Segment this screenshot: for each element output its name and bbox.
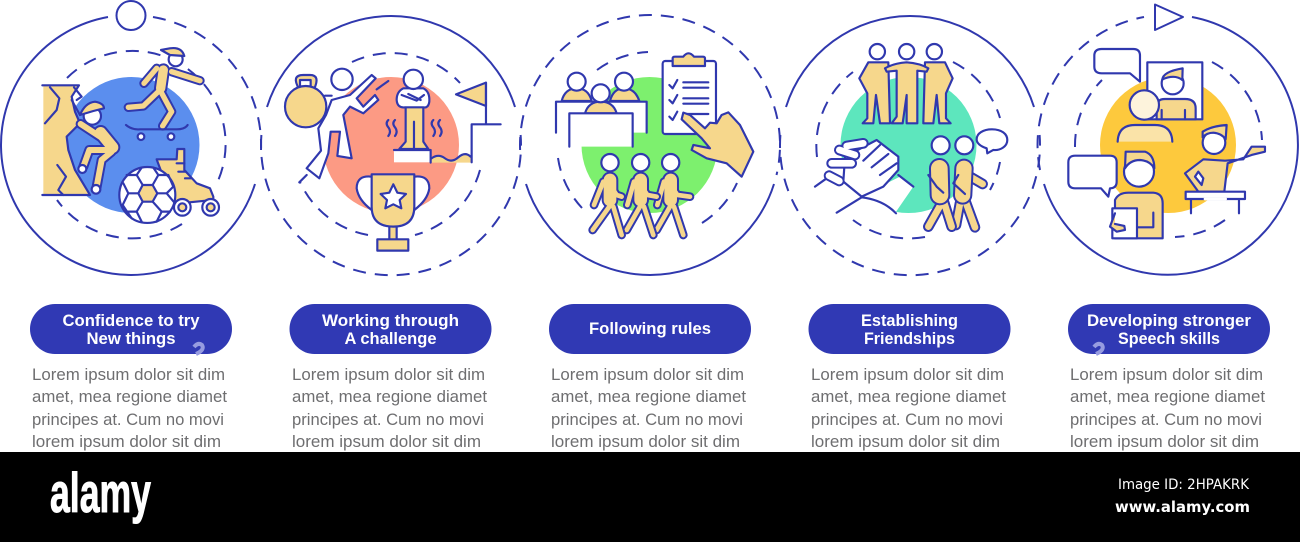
- watermark logo: alamy: [50, 461, 151, 524]
- icon: three friends: [859, 44, 953, 123]
- step label 4: Establishing: [861, 311, 958, 330]
- step label 1: [30, 304, 232, 354]
- icon: sports: [42, 48, 219, 223]
- body text 3: lorem ipsum dolor sit dim: [551, 433, 740, 451]
- icon: walkers: [593, 154, 690, 235]
- watermark footer bar: [0, 452, 1300, 542]
- image id: Image ID: 2HPAKRK: [1118, 477, 1250, 493]
- step label 5: Speech skills: [1118, 329, 1220, 348]
- outer ring: [520, 15, 780, 275]
- icon: teacher at lectern: [1185, 125, 1265, 213]
- step label 4: [808, 304, 1010, 354]
- body text 3: Lorem ipsum dolor sit dim: [551, 366, 744, 384]
- icon: runner: [299, 69, 388, 182]
- panel: friendships illustration: [780, 16, 1040, 275]
- step label 3: Following rules: [589, 319, 711, 338]
- icon: kettlebell: [285, 75, 326, 127]
- icon: pointing hand: [682, 112, 753, 177]
- body text 4: amet, mea regione diamet: [811, 388, 1006, 406]
- body text 4: lorem ipsum dolor sit dim: [811, 433, 1000, 451]
- body text 5: amet, mea regione diamet: [1070, 388, 1265, 406]
- outer ring: [1, 17, 261, 275]
- body text 2: principes at. Cum no movi: [292, 411, 484, 429]
- body text 4: [811, 366, 1006, 451]
- icon: handshake: [815, 140, 913, 213]
- body text 4: principes at. Cum no movi: [811, 411, 1003, 429]
- panel: speech illustration: [1038, 4, 1298, 275]
- panel: challenge illustration: [261, 16, 521, 275]
- icon: skateboarder: [126, 48, 200, 140]
- panel: rules illustration: [520, 15, 780, 275]
- step label 1: New things: [86, 329, 176, 348]
- icon: challenge: [285, 69, 501, 251]
- icon: trophy: [357, 174, 429, 251]
- icon: video call: [1147, 62, 1202, 119]
- body text 1: [32, 366, 227, 451]
- website: www.alamy.com: [1115, 498, 1250, 516]
- step label 3: [549, 304, 751, 354]
- step label 4: Friendships: [864, 329, 955, 348]
- icon: friendships: [815, 44, 1007, 227]
- step label 2: A challenge: [344, 329, 436, 348]
- inner dashed ring: [1075, 62, 1262, 237]
- step label 5: [1068, 304, 1270, 354]
- body text 4: Lorem ipsum dolor sit dim: [811, 366, 1004, 384]
- colored disc: blue: [64, 77, 200, 213]
- icon: two friends talking: [928, 129, 1007, 227]
- body text 3: amet, mea regione diamet: [551, 388, 746, 406]
- body text 2: Lorem ipsum dolor sit dim: [292, 366, 485, 384]
- icon: roller skate: [157, 149, 219, 216]
- body text 5: [1070, 366, 1265, 451]
- step label 5: Developing stronger: [1087, 311, 1251, 330]
- inner dashed ring: [300, 53, 480, 235]
- outer ring: [1038, 17, 1298, 275]
- body text 5: principes at. Cum no movi: [1070, 411, 1262, 429]
- colored disc: yellow: [1100, 77, 1236, 213]
- icon: presenter with paper: [1068, 152, 1163, 238]
- body text 1: amet, mea regione diamet: [32, 388, 227, 406]
- colored disc: teal: [840, 77, 976, 213]
- inner dashed ring: [57, 51, 226, 238]
- inner dashed ring: [816, 62, 1000, 238]
- body text 3: [551, 366, 746, 451]
- outer ring: [780, 16, 1040, 275]
- marker: circle: [116, 1, 146, 30]
- icon: speech: [1068, 49, 1265, 238]
- icon: rules: [556, 53, 753, 235]
- body text 2: [292, 366, 487, 451]
- icon: climbing rock: [42, 85, 90, 195]
- icon: listener: [1118, 90, 1172, 142]
- icon: judges panel: [556, 73, 647, 147]
- icon: flag and stairs: [431, 83, 501, 163]
- body text 5: lorem ipsum dolor sit dim: [1070, 433, 1259, 451]
- body text 2: lorem ipsum dolor sit dim: [292, 433, 481, 451]
- colored disc: green: [582, 77, 718, 213]
- icon: climber: [72, 87, 113, 194]
- icon: checklist: [663, 53, 716, 134]
- icon: pedestal figure: [387, 70, 442, 162]
- icon: soccer ball: [119, 167, 175, 223]
- body text 1: Lorem ipsum dolor sit dim: [32, 366, 225, 384]
- inner dashed ring: [558, 52, 737, 223]
- step label 2: [290, 304, 492, 354]
- body text 2: amet, mea regione diamet: [292, 388, 487, 406]
- body text 3: principes at. Cum no movi: [551, 411, 743, 429]
- icon: top speech bubble: [1094, 49, 1140, 82]
- body text 1: lorem ipsum dolor sit dim: [32, 433, 221, 451]
- marker: triangle: [1155, 4, 1183, 30]
- outer ring: [261, 16, 521, 275]
- step label 1: Confidence to try: [62, 311, 200, 330]
- panel: confidence illustration: [1, 1, 261, 275]
- step label 2: Working through: [322, 311, 459, 330]
- body text 5: Lorem ipsum dolor sit dim: [1070, 366, 1263, 384]
- body text 1: principes at. Cum no movi: [32, 411, 224, 429]
- colored disc: salmon: [323, 77, 459, 213]
